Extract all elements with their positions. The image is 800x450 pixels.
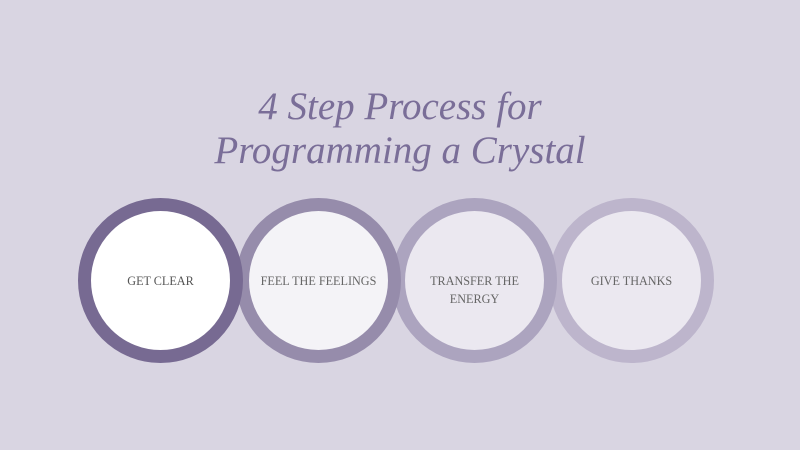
step 1: get clear	[78, 198, 243, 363]
step 1: get clear: GET CLEAR	[127, 274, 194, 288]
step 4: give thanks: GIVE THANKS	[591, 274, 672, 288]
step 3: transfer the energy	[392, 198, 557, 363]
step 3: transfer the energy: TRANSFER THE	[430, 274, 519, 288]
title	[214, 85, 586, 172]
title: Programming a Crystal	[214, 129, 586, 172]
step 4: give thanks	[549, 198, 714, 363]
step 3: transfer the energy: ENERGY	[450, 292, 499, 306]
step 2: feel the feelings	[236, 198, 401, 363]
step 2: feel the feelings: FEEL THE FEELINGS	[261, 274, 376, 288]
title: 4 Step Process for	[258, 85, 542, 128]
